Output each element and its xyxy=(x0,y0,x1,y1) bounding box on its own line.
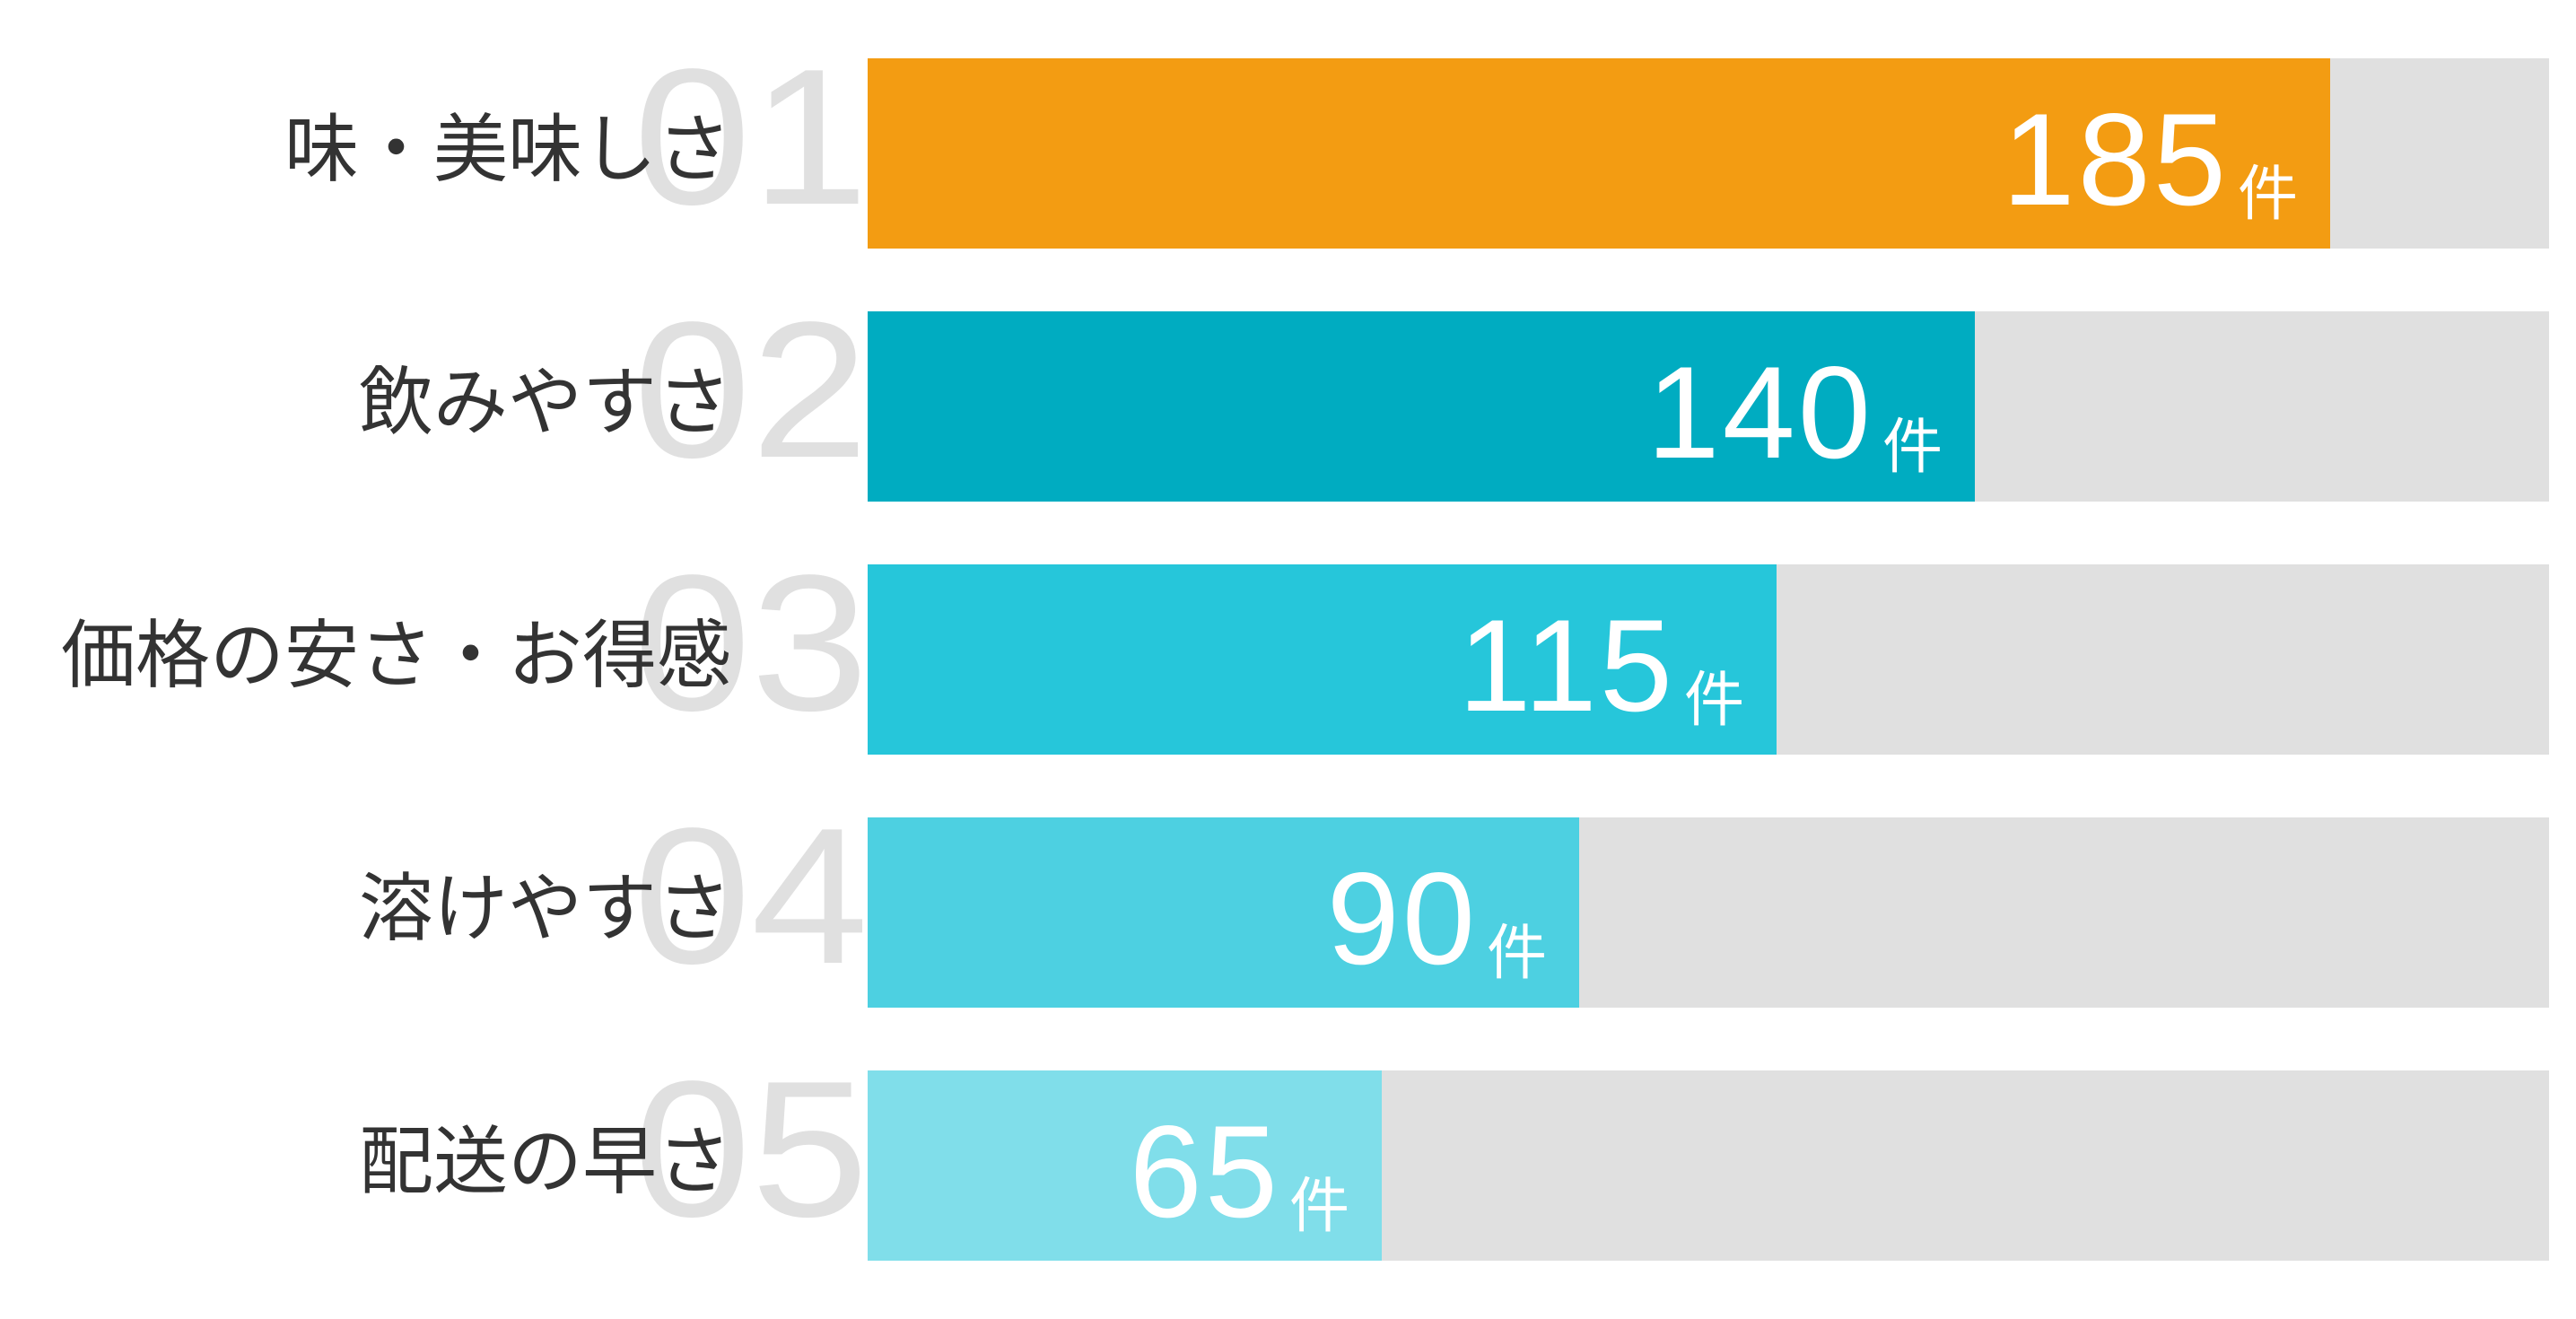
row 05: delivery speed xyxy=(359,1040,2549,1261)
unit: 件 xyxy=(1684,651,1744,738)
unit: 件 xyxy=(2238,145,2298,232)
value 115: 115 xyxy=(1458,592,1675,738)
label: solubility: 溶けやすさ xyxy=(359,867,731,950)
label: delivery speed: 配送の早さ xyxy=(359,1120,731,1203)
bar value 04 xyxy=(868,817,1579,1008)
unit: 件 xyxy=(1882,398,1943,485)
label: price: 価格の安さ・お得感 xyxy=(61,614,731,697)
row 02: ease of drinking xyxy=(359,281,2549,502)
row 03: price xyxy=(61,534,2549,755)
bar value 01 xyxy=(868,58,2330,249)
row 01: taste xyxy=(284,28,2549,249)
bar track 01 xyxy=(868,58,2549,249)
label: taste: 味・美味しさ xyxy=(284,108,731,191)
value 90: 90 xyxy=(1327,845,1478,991)
bar track 02 xyxy=(868,311,2549,502)
value 65: 65 xyxy=(1130,1098,1280,1245)
rank number 04: 04 xyxy=(633,787,869,1004)
label: ease of drinking: 飲みやすさ xyxy=(359,361,731,444)
rank number 02: 02 xyxy=(633,281,869,498)
rank number 05: 05 xyxy=(633,1040,869,1257)
unit: 件 xyxy=(1487,904,1547,991)
bar value 03 xyxy=(868,564,1777,755)
bar track 05 xyxy=(868,1070,2549,1261)
bar track 04 xyxy=(868,817,2549,1008)
bar track 03 xyxy=(868,564,2549,755)
row 04: solubility xyxy=(359,787,2549,1008)
unit: 件 xyxy=(1289,1157,1349,1245)
rank number 03: 03 xyxy=(633,534,869,751)
rank number 01: 01 xyxy=(633,28,869,245)
value 185: 185 xyxy=(2002,86,2229,232)
bar value 02 xyxy=(868,311,1975,502)
value 140: 140 xyxy=(1646,339,1873,485)
bar value 05 xyxy=(868,1070,1382,1261)
